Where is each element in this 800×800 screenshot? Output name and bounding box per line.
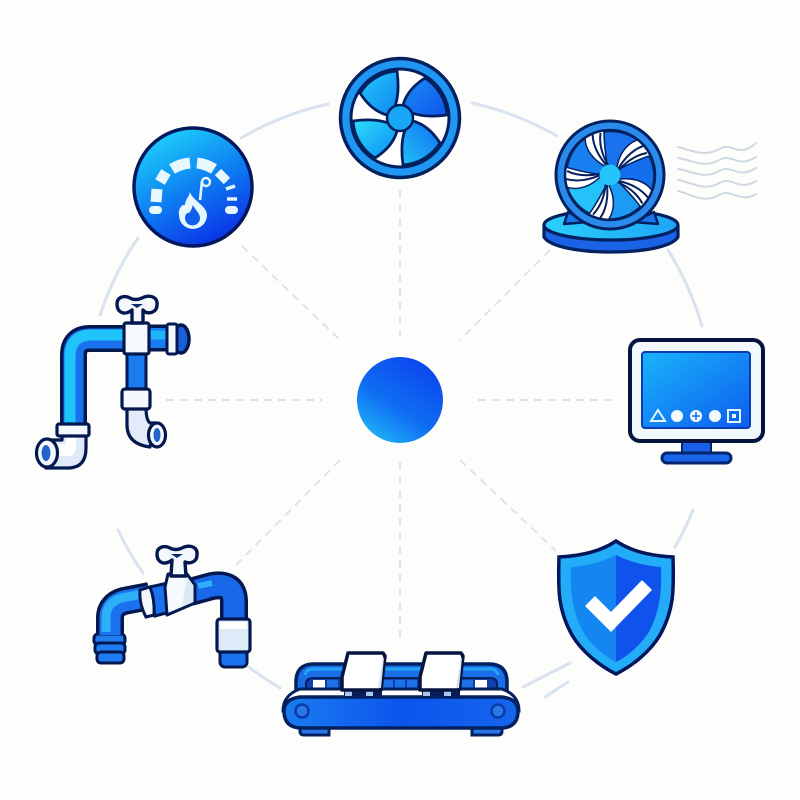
lower right collar — [217, 619, 250, 652]
icon: air waves — [678, 143, 756, 199]
monitor screen — [642, 352, 750, 428]
check mark — [590, 585, 647, 622]
valve body — [124, 323, 149, 354]
lower right blue end — [220, 648, 247, 667]
bottom white elbow — [46, 434, 86, 468]
icon: desk fan with base — [544, 121, 678, 252]
icon: conveyor belt — [283, 653, 519, 735]
monitor frame — [630, 340, 763, 441]
conveyor rollers — [296, 704, 308, 718]
dashed spokes — [166, 190, 616, 640]
outer ring segments — [100, 103, 702, 697]
icon: pressure gauge with flame — [134, 128, 252, 246]
icon: faucet — [94, 546, 250, 667]
monitor stand — [682, 440, 711, 454]
screen icons — [651, 410, 740, 422]
box supports — [344, 689, 382, 696]
icon: pipe with valve — [36, 296, 189, 468]
fan cage — [556, 121, 664, 229]
left collar — [140, 587, 154, 617]
icon: axial fan — [340, 58, 460, 178]
valve handle — [117, 296, 157, 323]
box 1 — [342, 653, 385, 690]
right pipe end — [173, 325, 189, 353]
center circle — [357, 357, 443, 443]
conveyor body — [284, 697, 518, 728]
middle pipe section — [150, 583, 170, 616]
conveyor belt band — [283, 689, 519, 711]
left pipe — [106, 593, 150, 635]
valve body — [165, 574, 195, 615]
conveyor feet — [300, 722, 329, 735]
ribbed spout end — [94, 634, 125, 663]
conveyor back frame — [296, 664, 507, 692]
icon: monitor — [630, 340, 763, 463]
box 2 — [420, 653, 463, 690]
fan base — [544, 210, 678, 252]
drop pipe — [127, 352, 146, 390]
right pipe — [190, 583, 234, 624]
valve handle — [157, 546, 197, 576]
lower white elbow — [127, 407, 156, 447]
conveyor slats — [313, 680, 487, 690]
main elbow pipe — [70, 335, 170, 425]
icon: shield with check — [559, 541, 673, 674]
